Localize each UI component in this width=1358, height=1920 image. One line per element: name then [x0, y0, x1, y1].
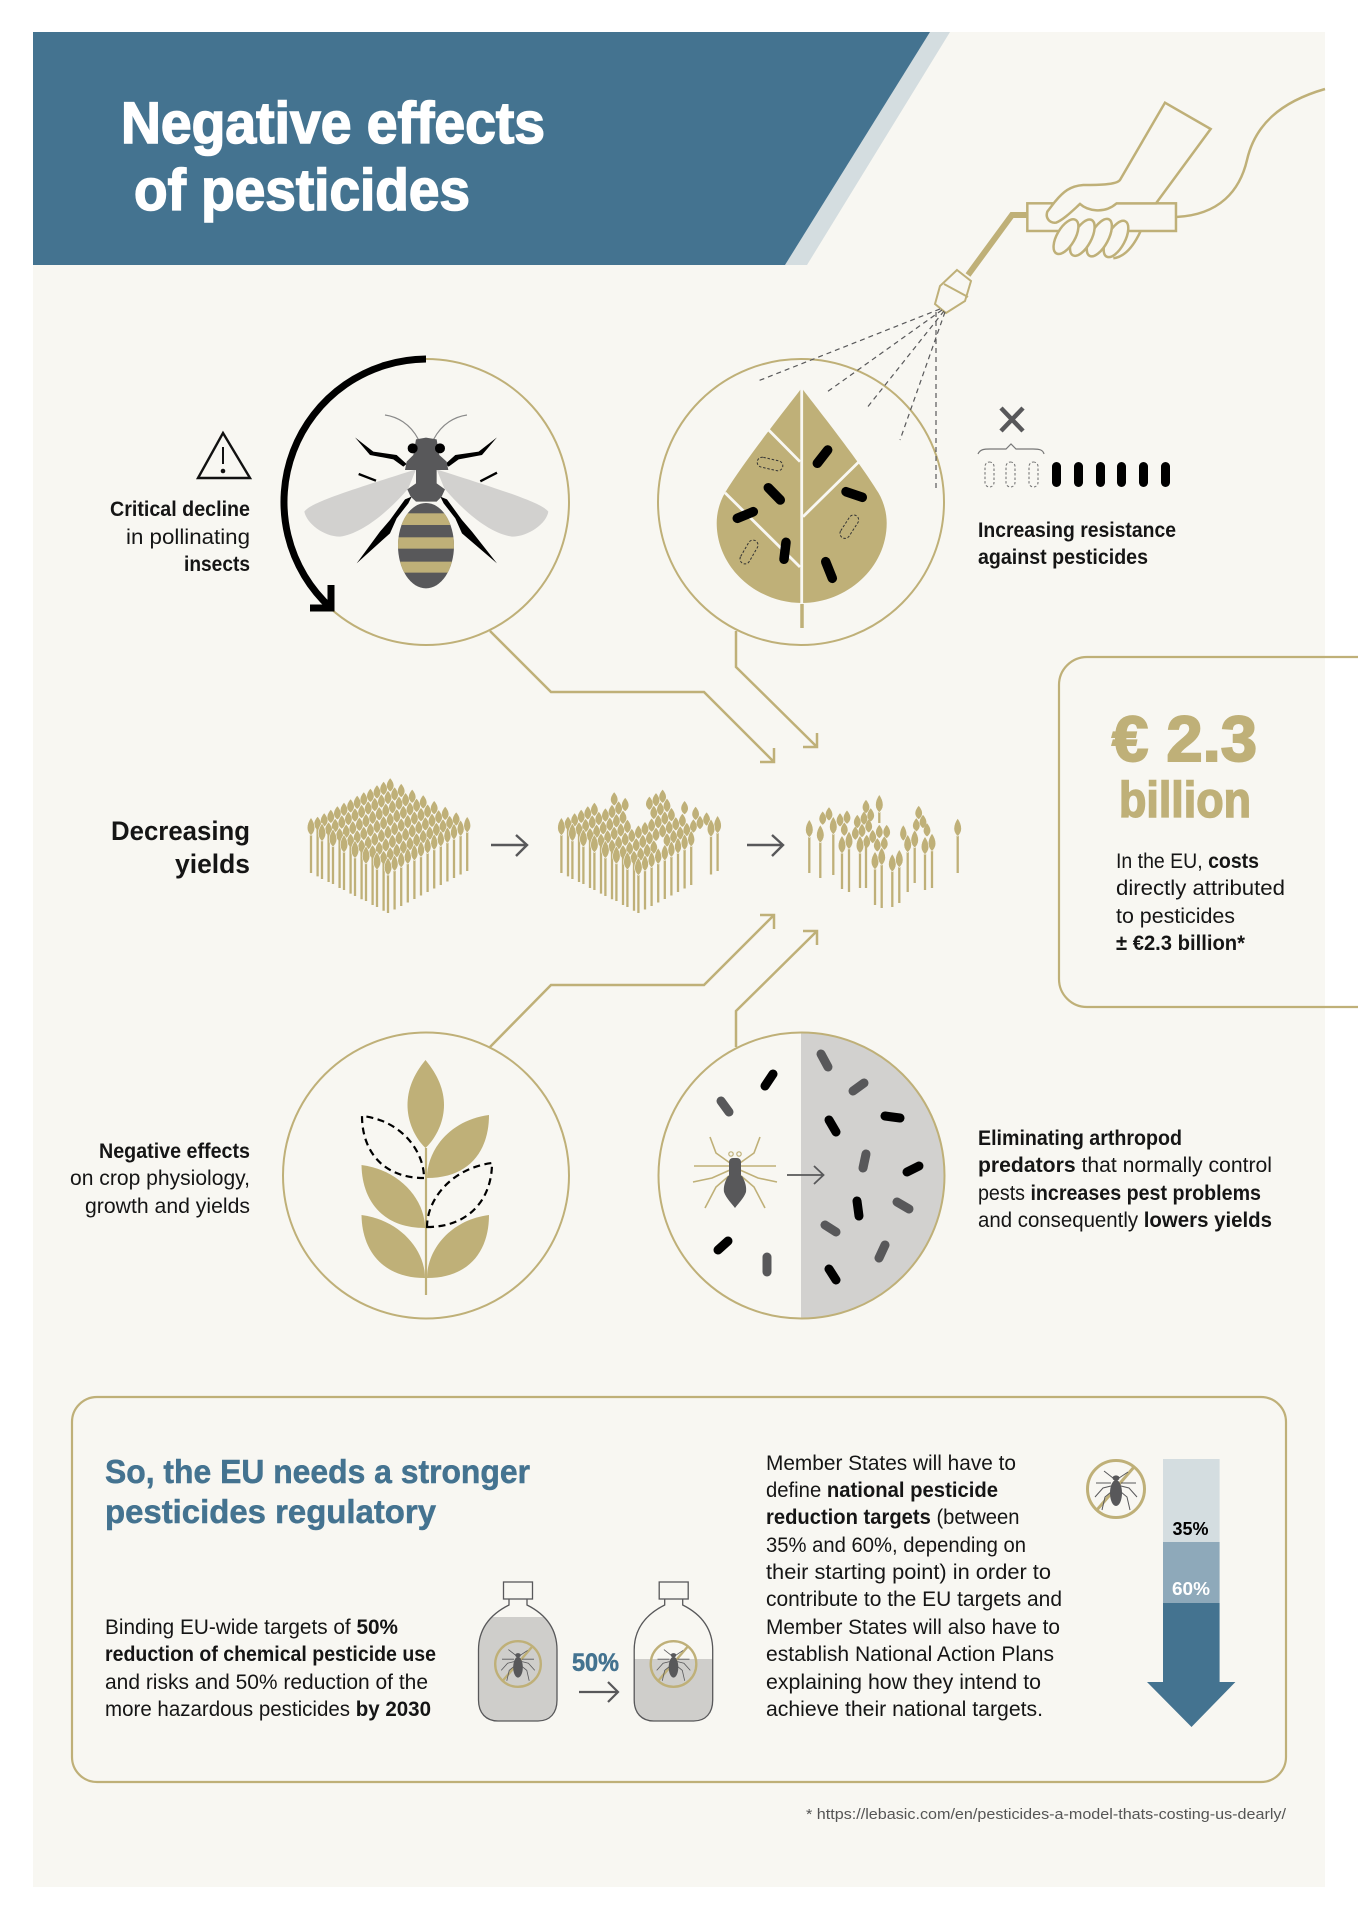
- spray dashed lines: [758, 309, 945, 489]
- arrow: field one to field two: [491, 835, 527, 856]
- label: 60 percent: 60%: [1172, 1579, 1210, 1599]
- text: eliminating arthropod predators: [978, 1127, 1272, 1232]
- text: critical decline: Critical decline: [110, 498, 250, 521]
- text: member states targets: reduction targets (between: [766, 1506, 1020, 1529]
- icon: half bottle: [634, 1581, 714, 1722]
- icon: eliminated pests on leaf: [738, 456, 861, 566]
- text: member states targets: Member States will have to: [766, 1452, 1016, 1475]
- icon: spider: [693, 1137, 777, 1208]
- heading: EU needs stronger regulatory: [105, 1453, 530, 1530]
- panel: leaf circle: [658, 359, 944, 645]
- icon: hand holding sprayer: [935, 89, 1325, 313]
- footnote: * https://lebasic.com/en/pesticides-a-model-thats-costing-us-dearly/: [806, 1806, 1287, 1823]
- heading: EU needs stronger regulatory: So, the EU needs a stronger: [105, 1453, 530, 1490]
- heading: decreasing yields: yields: [175, 849, 250, 879]
- icon: leaf: [717, 388, 887, 603]
- label: 35 percent: 35%: [1172, 1519, 1208, 1539]
- icon: bee: [304, 415, 548, 590]
- chart: full wheat field: [307, 778, 471, 913]
- title: [121, 91, 545, 223]
- heading: decreasing yields: Decreasing: [111, 816, 250, 846]
- text: negative effects on crops: [70, 1140, 250, 1218]
- text: member states targets: explaining how they intend to: [766, 1671, 1041, 1694]
- connector arrow: resistance to yields: [736, 631, 817, 747]
- icon: resistant pests on leaf: [737, 450, 862, 578]
- icon: warning triangle: [198, 433, 250, 478]
- connector arrow: crop physiology to yields: [490, 915, 774, 1047]
- text: critical decline: insects: [184, 553, 250, 576]
- description: to pesticides: [1116, 905, 1235, 928]
- icon: plant: [362, 1060, 492, 1295]
- chart: sparse wheat field: [806, 794, 962, 908]
- connector arrow: pollinators to yields: [490, 631, 774, 762]
- title: Negative effects: [121, 91, 545, 156]
- text: member states targets: Member States will also have to: [766, 1616, 1060, 1639]
- panel: EU regulatory box: [72, 1397, 1286, 1782]
- icon: no insects: [1088, 1460, 1144, 1518]
- text: binding EU targets: reduction of chemical pesticide use: [105, 1643, 436, 1666]
- text: eliminating arthropod predators: and consequently lowers yields: [978, 1209, 1272, 1232]
- icon: full bottle: [478, 1581, 558, 1722]
- big number: € 2.3: [1112, 703, 1257, 775]
- text: critical decline: in pollinating: [126, 526, 250, 549]
- connector arrow: predators to yields: [736, 931, 817, 1047]
- panel: plant circle: [283, 1032, 569, 1318]
- heading: decreasing yields: [111, 816, 250, 879]
- unit: billion: [1119, 772, 1251, 828]
- icon: grey pests: [721, 1054, 909, 1272]
- text: negative effects on crops: on crop physiology,: [70, 1167, 250, 1190]
- text: negative effects on crops: growth and yields: [85, 1195, 250, 1218]
- text: member states targets: contribute to the EU targets and: [766, 1588, 1062, 1611]
- icon: black pests: [718, 1074, 919, 1280]
- text: binding EU targets: Binding EU-wide targets of 50%: [105, 1616, 398, 1639]
- text: critical decline: [110, 498, 250, 576]
- description: directly attributed: [1116, 877, 1285, 900]
- description: [1116, 850, 1285, 955]
- title: of pesticides: [134, 158, 470, 223]
- text: member states targets: [766, 1452, 1062, 1721]
- panel: bee circle with decline arrow: [283, 359, 569, 645]
- text: member states targets: 35% and 60%, depending on: [766, 1534, 1026, 1557]
- chart: reduction target arrow: [1147, 1459, 1235, 1727]
- text: increasing resistance: against pesticides: [978, 546, 1148, 569]
- text: eliminating arthropod predators: predators that normally control: [978, 1154, 1272, 1177]
- text: binding EU targets: and risks and 50% reduction of the: [105, 1671, 428, 1694]
- text: increasing resistance: [978, 519, 1176, 569]
- chart: damaged wheat field: [558, 790, 721, 913]
- description: ± €2.3 billion*: [1116, 932, 1246, 955]
- panel: spider and pests circle: [658, 1032, 944, 1318]
- heading: EU needs stronger regulatory: pesticides regulatory: [105, 1493, 437, 1530]
- arrow: predators removed: [787, 1166, 824, 1184]
- text: member states targets: establish National Action Plans: [766, 1643, 1054, 1666]
- text: negative effects on crops: Negative effects: [99, 1140, 250, 1163]
- callout box: 2.3 billion: [1059, 657, 1358, 1007]
- text: eliminating arthropod predators: Eliminating arthropod: [978, 1127, 1182, 1150]
- text: increasing resistance: Increasing resistance: [978, 519, 1176, 542]
- text: binding EU targets: [105, 1616, 436, 1721]
- text: member states targets: achieve their national targets.: [766, 1698, 1043, 1721]
- description: In the EU, costs: [1116, 850, 1259, 873]
- text: member states targets: define national pesticide: [766, 1479, 998, 1502]
- text: member states targets: their starting point) in order to: [766, 1561, 1051, 1584]
- header banner: [33, 32, 950, 265]
- arrow: field two to field three: [747, 835, 783, 856]
- label: 50 percent: 50%: [572, 1649, 619, 1677]
- icon: resistance bar row: [978, 408, 1170, 487]
- text: eliminating arthropod predators: pests increases pest problems: [978, 1182, 1261, 1205]
- arrow: bottle reduction: [579, 1682, 618, 1702]
- text: binding EU targets: more hazardous pesticides by 2030: [105, 1698, 431, 1721]
